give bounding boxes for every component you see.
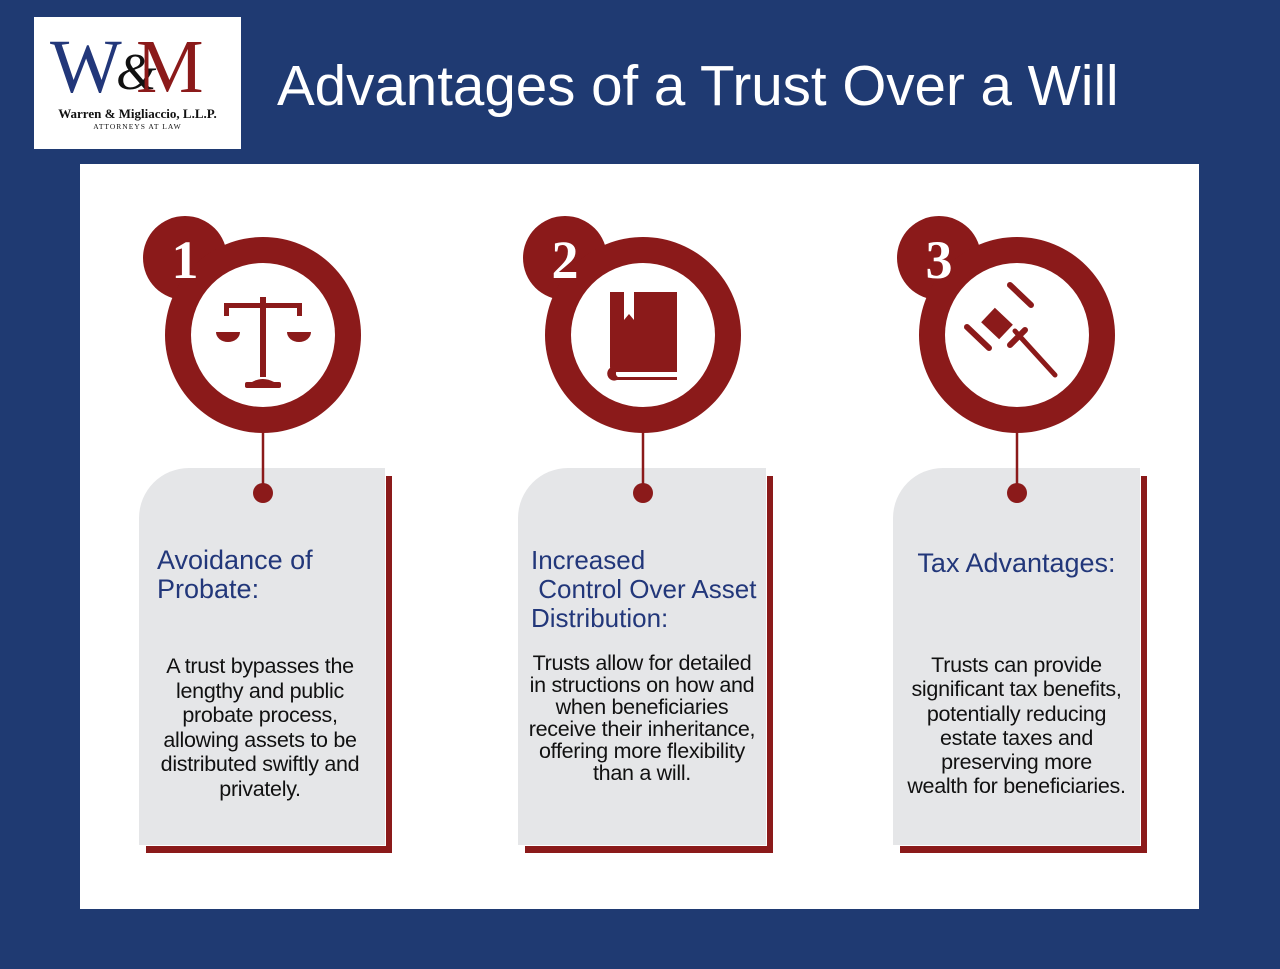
- card 2 text: [529, 545, 756, 785]
- heading 2: Increased: [531, 545, 645, 575]
- firm name: [58, 106, 217, 131]
- body 3: potentially reducing: [927, 702, 1106, 726]
- body 1: probate process,: [182, 703, 338, 727]
- body 1: distributed swiftly and: [161, 752, 359, 776]
- body 1: privately.: [219, 776, 301, 800]
- item 1 graphics: 1: [172, 230, 198, 290]
- item 1 graphics: [139, 216, 392, 853]
- heading 3: Tax Advantages:: [917, 548, 1116, 578]
- body 3: estate taxes and: [940, 726, 1093, 750]
- item 3 graphics: 3: [926, 230, 952, 290]
- heading 2: Control Over Asset: [538, 574, 756, 604]
- firm name: Warren & Migliaccio, L.L.P.: [58, 106, 217, 121]
- heading 1: Probate:: [157, 574, 259, 604]
- body 3: wealth for beneficiaries.: [907, 774, 1126, 798]
- heading 1: [157, 545, 313, 604]
- heading 2: Distribution:: [531, 603, 668, 633]
- body 1: A trust bypasses the: [166, 654, 354, 678]
- body 3: [907, 653, 1126, 798]
- card 1 text: [157, 545, 359, 800]
- body 1: [161, 654, 359, 800]
- body 2: receive their inheritance,: [529, 717, 755, 741]
- body 2: in structions on how and: [530, 673, 754, 697]
- logo mark: [50, 25, 204, 109]
- body 2: than a will.: [593, 761, 691, 785]
- heading 1: Avoidance of: [157, 545, 313, 575]
- title: Advantages of a Trust Over a Will: [277, 54, 1119, 117]
- firm name: ATTORNEYS AT LAW: [93, 122, 182, 131]
- card 3 text: [907, 548, 1126, 798]
- body 3: Trusts can provide: [931, 653, 1102, 677]
- body 2: Trusts allow for detailed: [533, 651, 751, 675]
- logo mark: W: [50, 25, 122, 109]
- body 3: significant tax benefits,: [911, 677, 1122, 701]
- body 2: [529, 651, 755, 785]
- item 3 graphics: [893, 216, 1147, 853]
- heading 2: [531, 545, 756, 633]
- body 1: lengthy and public: [176, 678, 344, 702]
- body 2: offering more flexibility: [539, 739, 745, 763]
- logo mark: &: [116, 44, 156, 101]
- main panel: [80, 164, 1199, 909]
- body 3: preserving more: [941, 750, 1092, 774]
- body 1: allowing assets to be: [163, 728, 357, 752]
- body 2: when beneficiaries: [556, 695, 728, 719]
- item 2 graphics: 2: [552, 230, 578, 290]
- logo box: [34, 17, 241, 149]
- logo mark: M: [136, 25, 204, 109]
- item 2 graphics: [518, 216, 773, 853]
